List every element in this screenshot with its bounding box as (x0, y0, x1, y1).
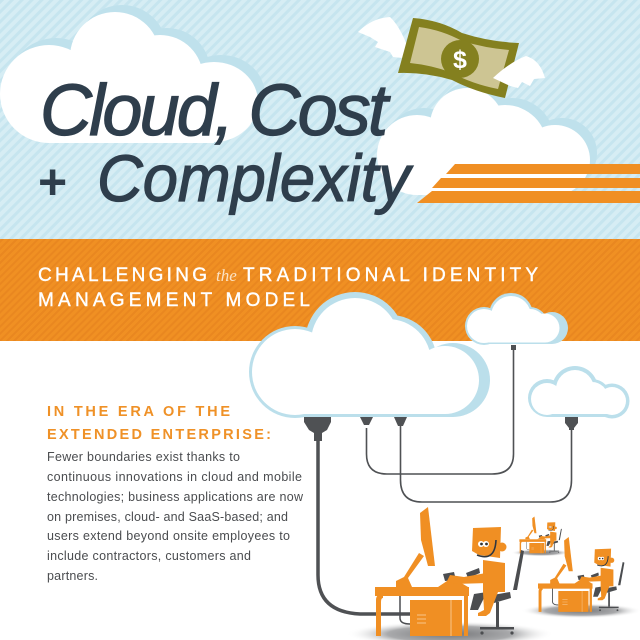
cloud: large (249, 292, 490, 418)
connector: large cloud to small top cloud (360, 345, 516, 474)
title: Cloud, Cost (40, 71, 391, 151)
banner subtitle: CHALLENGING (38, 265, 207, 286)
icon: flying dollar bill (358, 17, 545, 98)
connector: main cable to desktop (304, 417, 412, 614)
section heading: IN THE ERA OF THE (47, 404, 230, 420)
body text: technologies; business applications are now (47, 490, 304, 504)
person at desk: distant (511, 516, 570, 556)
banner subtitle: TRADITIONAL IDENTITY (243, 265, 538, 286)
body text: include contractors, customers and (47, 549, 251, 563)
person at desk: middle (521, 537, 640, 618)
left wing (358, 17, 412, 59)
section heading: EXTENDED ENTERPRISE: (47, 427, 271, 443)
body text: users extend beyond onsite employees to (47, 529, 290, 543)
body text: on premises, cloud- and SaaS-based; and (47, 510, 288, 524)
banner subtitle: the (216, 266, 237, 285)
title: Complexity (97, 141, 414, 215)
section heading (47, 404, 271, 443)
cloud: top left (0, 5, 265, 143)
banner subtitle (38, 265, 538, 311)
connector: large cloud to small right cloud (394, 417, 578, 502)
banner subtitle: MANAGEMENT MODEL (38, 290, 310, 311)
body text: continuous innovations in cloud and mobile (47, 470, 302, 484)
cloud: top right (377, 81, 597, 195)
title (38, 71, 414, 215)
body text: partners. (47, 569, 98, 583)
bill (398, 18, 519, 98)
right wing (493, 56, 545, 88)
speed stripes (417, 164, 640, 203)
body text (47, 450, 304, 583)
cloud: small right (528, 366, 630, 418)
orange banner (0, 239, 640, 341)
title: + (38, 154, 67, 210)
cloud: small top (465, 293, 568, 345)
dollar sign: $ (453, 46, 467, 74)
person at desk: main (346, 507, 554, 640)
body text: Fewer boundaries exist thanks to (47, 450, 240, 464)
sky background (0, 0, 640, 239)
